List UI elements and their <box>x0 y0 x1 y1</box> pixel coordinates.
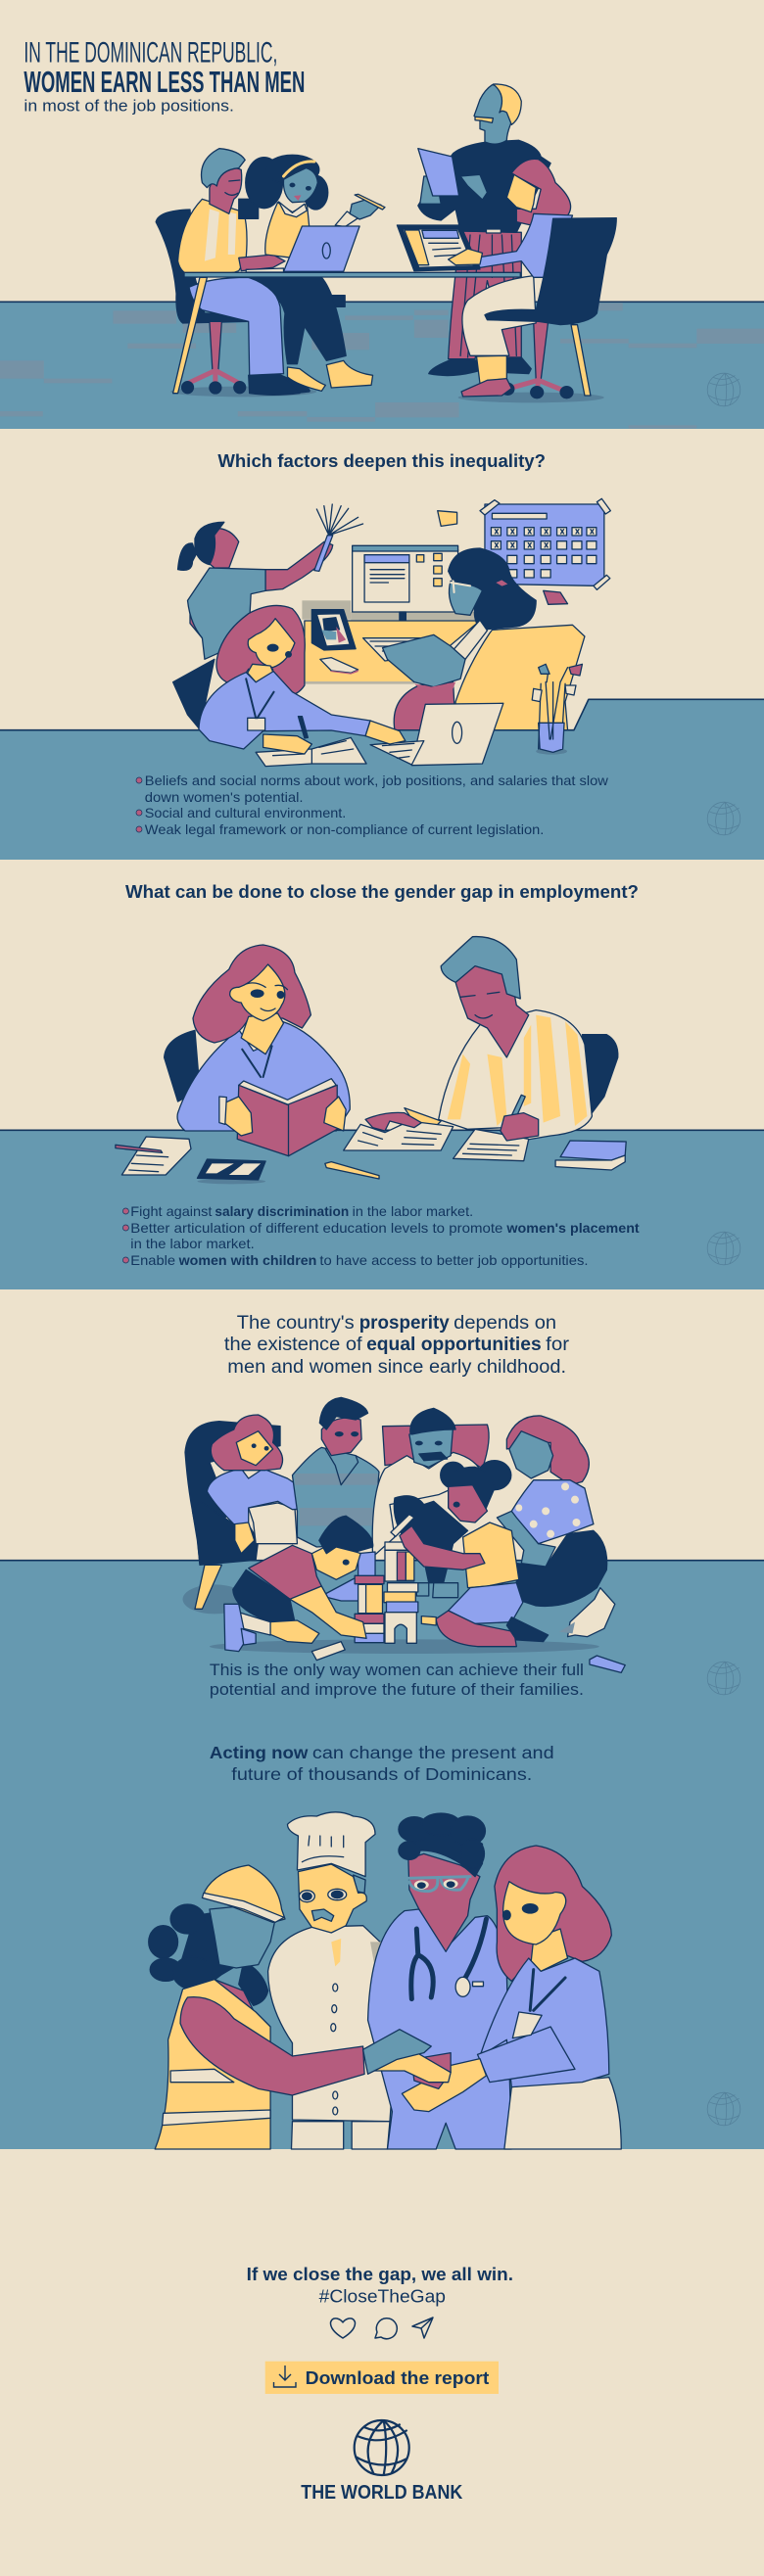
computer monitor <box>302 545 478 631</box>
watermark globe <box>707 1662 740 1695</box>
bullet list: factors <box>136 773 609 837</box>
table <box>173 272 520 394</box>
text: acting now: future of thousands of Dominicans. <box>231 1764 532 1784</box>
man in striped shirt with chair <box>156 149 310 395</box>
periwinkle block behind tower <box>321 1552 375 1601</box>
desk items <box>116 1137 626 1184</box>
illustration: office meeting <box>0 84 764 429</box>
watermark globe <box>707 373 740 406</box>
text: prosperity: prosperity <box>359 1312 450 1334</box>
heading: which factors: Which factors deepen this inequality? <box>217 450 546 471</box>
title: IN THE DOMINICAN REPUBLIC, <box>24 37 277 69</box>
bullet list: actions <box>122 1203 640 1268</box>
bullet list: actions: in the labor market. <box>353 1203 473 1219</box>
icon: paper plane <box>412 2318 433 2338</box>
watermark globe <box>707 2092 740 2126</box>
text: full potential: This is the only way women can achieve their full <box>210 1662 584 1679</box>
text: full potential: potential and improve the future of their families. <box>210 1681 584 1699</box>
bullet list: factors: Beliefs and social norms about work, job positions, and salaries that slow <box>145 773 609 788</box>
text: acting now: can change the present and <box>312 1743 554 1762</box>
floor: office <box>0 302 764 429</box>
bullet list: factors: Social and cultural environment. <box>145 805 346 820</box>
text: acting now <box>210 1743 554 1784</box>
bullet list: actions: Enable <box>130 1252 175 1268</box>
text: prosperity: The country's <box>237 1312 355 1334</box>
vase with flowers <box>532 664 582 755</box>
woman in polka dot blouse <box>497 1416 615 1637</box>
bullet list: actions: women with children <box>178 1252 316 1268</box>
laptop on desk <box>370 703 503 766</box>
desk with frame keyboard and phone <box>305 610 480 684</box>
block towers <box>355 1542 418 1643</box>
title <box>24 37 305 115</box>
text: prosperity <box>224 1312 570 1378</box>
chef <box>268 1812 395 2149</box>
heading: close the gap: What can be done to close the gender gap in employment? <box>125 881 639 902</box>
floor: desk scene <box>0 699 764 860</box>
loose blocks <box>311 1616 625 1672</box>
bullet list: factors: Weak legal framework or non-compliance of current legislation. <box>145 821 544 837</box>
doctor <box>368 1813 511 2149</box>
bullet list: actions: to have access to better job opportunities. <box>319 1252 588 1268</box>
man in blue sweater <box>292 1397 379 1547</box>
woman writing in notebook <box>173 605 406 767</box>
wall notes and calendar <box>438 498 610 604</box>
watermark globe <box>707 802 740 835</box>
logo: The World Bank: THE WORLD BANK <box>301 2482 463 2504</box>
logo: The World Bank <box>301 2420 463 2504</box>
icon: speech bubble <box>375 2318 397 2339</box>
text: prosperity: equal opportunities <box>366 1334 542 1355</box>
joined hands <box>363 2030 486 2112</box>
illustration: family playing with blocks <box>0 1397 764 1672</box>
illustration: workplace desk <box>0 498 764 767</box>
text: prosperity: for <box>546 1334 570 1355</box>
standing man with tablet <box>418 84 550 376</box>
man writing <box>344 937 618 1161</box>
woman reading a book <box>165 945 350 1156</box>
bullet list: actions: in the labor market. <box>130 1236 255 1251</box>
floor: family and team <box>0 1560 764 2149</box>
title: in most of the job positions. <box>24 97 234 115</box>
download button <box>265 2362 499 2394</box>
title: WOMEN EARN LESS THAN MEN <box>24 66 305 99</box>
floor: study table <box>0 1130 764 1289</box>
bullet list: actions: Fight against <box>130 1203 213 1219</box>
icon: heart <box>330 2318 356 2338</box>
cleaning woman with duster <box>178 504 363 659</box>
girl playing <box>391 1461 549 1647</box>
bullet list: actions: women's placement <box>505 1220 640 1236</box>
text: prosperity: men and women since early childhood. <box>227 1356 566 1378</box>
illustration: two people studying <box>0 937 764 1184</box>
seated woman with glasses and yellow chair <box>382 548 585 730</box>
man with mustache and magenta chair <box>372 1408 489 1598</box>
text: prosperity: depends on <box>454 1312 556 1334</box>
text: prosperity: the existence of <box>224 1334 362 1355</box>
seated woman with laptop and chair <box>397 159 616 398</box>
boy playing <box>224 1516 373 1652</box>
closing message: #CloseTheGap <box>319 2287 446 2307</box>
text: full potential <box>210 1662 584 1699</box>
illustration: team with hands together <box>149 1812 621 2149</box>
closing message <box>247 2264 513 2307</box>
watermark globe <box>707 1232 740 1265</box>
closing message: If we close the gap, we all win. <box>247 2264 513 2284</box>
download button: Download the report <box>306 2368 489 2388</box>
woman on armchair <box>185 1415 370 1609</box>
woman with badge <box>478 1846 621 2149</box>
bullet list: actions: Better articulation of different education levels to promote <box>130 1220 503 1236</box>
bullet list: actions: salary discrimination <box>215 1203 349 1219</box>
woman with curly hair <box>239 155 385 391</box>
text: acting now: Acting now <box>210 1743 309 1762</box>
construction worker <box>149 1865 364 2149</box>
bullet list: factors: down women's potential. <box>145 789 304 805</box>
